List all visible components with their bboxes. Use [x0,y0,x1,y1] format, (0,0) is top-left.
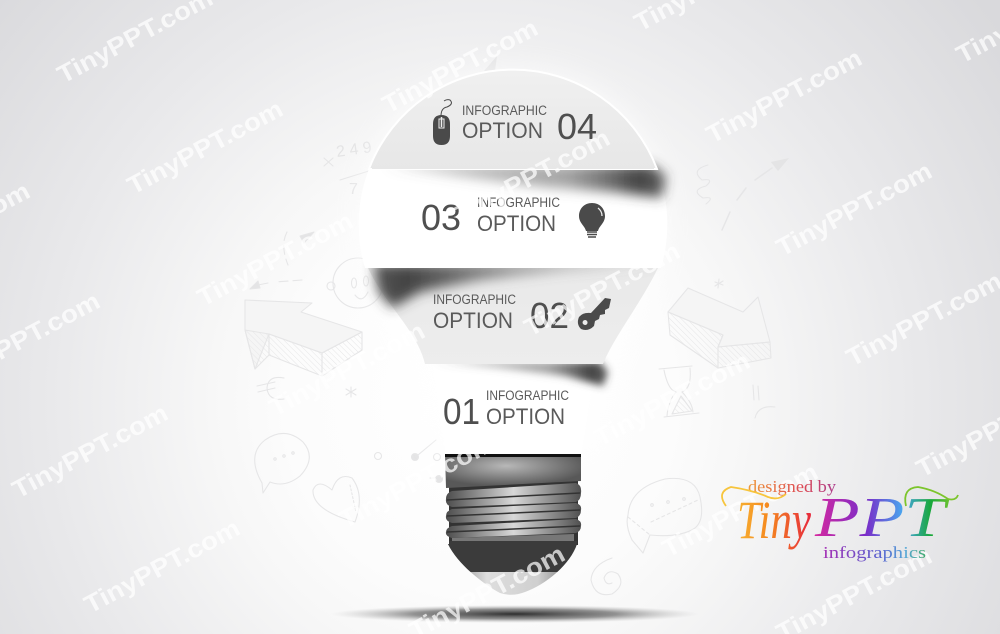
sketch: euro sign [257,377,284,399]
logo line: designed by: designed by [748,477,837,496]
label: infographic option: INFOGRAPHIC [462,103,547,118]
number 04: 04 [557,106,597,147]
band 02: tapered grey neck [367,266,659,364]
logo word: PPT: PPT [814,487,950,549]
sketch: chat bubble left [255,433,309,493]
watermarks: TinyPPT.com [772,157,937,262]
band 03: white widest slice [359,169,667,268]
option 02 [433,292,611,336]
watermarks: TinyPPT.com [842,267,1000,372]
logo word: Tiny: Tiny [737,490,811,550]
watermarks: TinyPPT.com [590,347,755,452]
watermarks: TinyPPT.com [335,429,500,534]
icon: light bulb [579,203,605,237]
sketch: asterisk right [715,279,723,288]
option 01 [443,388,569,432]
sketch: heart [313,476,359,522]
label: infographic option: OPTION [486,404,565,429]
watermarks: TinyPPT.com [520,237,685,342]
sketch: curly scribble [697,165,710,204]
sketch: hourglass [659,366,699,417]
sketch: asterisk left [346,387,356,397]
label: infographic option [486,388,569,429]
icon: key [578,298,611,330]
label: infographic option: INFOGRAPHIC [477,195,560,210]
dark insulator [448,544,577,572]
label: infographic option [462,103,547,143]
sketch: network nodes [374,440,442,482]
label: infographic option: OPTION [462,118,543,143]
sketch: smiley face [327,258,383,308]
watermarks: TinyPPT.com [658,458,823,563]
label: infographic option: OPTION [433,308,513,333]
threads [446,483,581,543]
watermarks: TinyPPT.com [378,14,543,119]
label: infographic option: INFOGRAPHIC [433,292,516,307]
collar [445,454,581,488]
sketch: chat bubble right [627,478,702,553]
bulb screw base [445,454,581,595]
bulb [359,70,667,456]
band 04: top dome [369,70,657,169]
watermarks: TinyPPT.com [193,207,358,312]
watermarks: TinyPPT.com [265,317,430,422]
watermarks: TinyPPT.com [702,44,867,149]
watermarks: TinyPPT.com [123,95,288,200]
sketches: doodles behind the bulb [245,56,789,595]
white glow around bulb [362,70,663,450]
sketch: arithmetic: 7 [349,181,358,198]
label: infographic option: INFOGRAPHIC [486,388,569,403]
sketch: sad lines [753,385,775,418]
watermarks: TinyPPT.com [450,124,615,229]
option 03 [421,195,605,238]
watermarks: TinyPPT.com [8,399,173,504]
label: infographic option: OPTION [477,211,556,236]
shadow under band 04 [385,165,666,198]
sketch: spiral [591,558,621,595]
watermarks: TinyPPT.com [80,514,245,619]
icon: mouse [433,100,451,145]
sketch: top corner arrow [484,56,497,71]
logo swash: first T [722,487,786,506]
insulator top edge [449,541,577,545]
metal tip [448,544,577,595]
number 03: 03 [421,197,461,238]
floor shadow [331,605,699,623]
band 04 bottom edge [372,167,654,169]
logo line: infographics: infographics [823,543,926,562]
shadow under band 02 [435,362,608,386]
sketch: dashed arrow right [722,158,789,230]
dark backing [449,476,578,545]
label: infographic option [433,292,516,333]
number 02: 02 [530,295,569,336]
sketch: arithmetic [324,139,373,198]
shadow under band 03 [374,264,660,308]
number 01: 01 [443,391,480,432]
label: infographic option [477,195,560,236]
band 01: white neck [432,360,596,456]
sketch: left 3D arrow [245,300,362,376]
sketch: left dashed arrow [250,232,314,289]
option 04 [433,100,597,147]
sketch: arithmetic: 2 4 9 [335,139,373,161]
sketch: right 3D arrow [668,288,771,368]
logo swash: final T [905,487,958,506]
logo: designed by TinyPPT infographics [722,477,958,562]
